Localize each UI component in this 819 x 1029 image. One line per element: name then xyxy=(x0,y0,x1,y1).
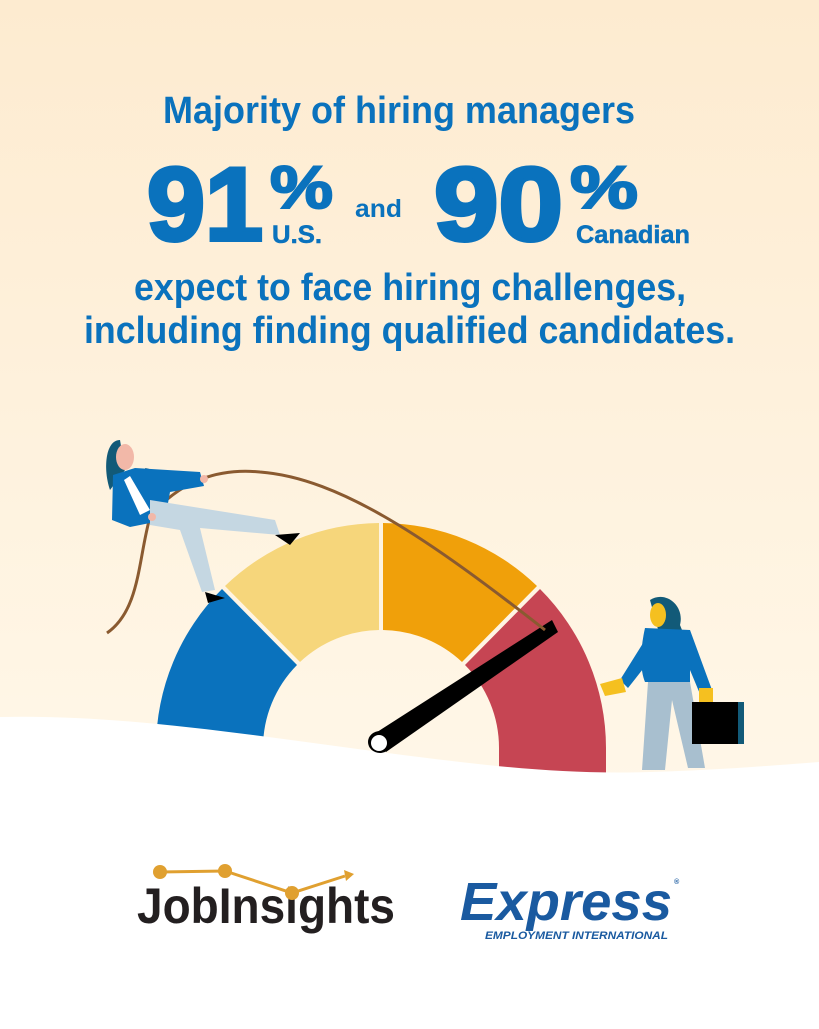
connector: and: and xyxy=(355,195,402,223)
stat: 90% Canadian: Canadian xyxy=(576,221,690,249)
logo: Express Employment International: Express xyxy=(460,872,672,932)
stat: 91% U.S.: % xyxy=(270,154,333,221)
white wave ground xyxy=(0,717,819,1024)
logo: Express Employment International: EMPLOYMENT INTERNATIONAL xyxy=(485,930,668,942)
stat: 90% Canadian: 90 xyxy=(434,147,563,263)
stat: 91% U.S.: 91 xyxy=(147,147,263,263)
gauge xyxy=(156,523,606,775)
figure: woman pulling rope xyxy=(106,440,300,603)
heading line 1: Majority of hiring managers xyxy=(163,90,635,132)
logo: JobInsights: JobInsights xyxy=(137,878,395,934)
headline xyxy=(84,90,735,352)
heading line 3: expect to face hiring challenges, xyxy=(134,267,686,309)
heading line 4: including finding qualified candidates. xyxy=(84,310,735,352)
needle xyxy=(368,620,558,753)
stat: 91% U.S. xyxy=(147,147,333,263)
stat: 90% Canadian: % xyxy=(570,154,638,221)
rope xyxy=(107,471,545,633)
logo: Express Employment International: ® xyxy=(674,878,680,886)
stat: 90% Canadian xyxy=(434,147,690,263)
stat: 91% U.S.: U.S. xyxy=(272,221,322,249)
figure: woman with briefcase xyxy=(600,597,744,770)
